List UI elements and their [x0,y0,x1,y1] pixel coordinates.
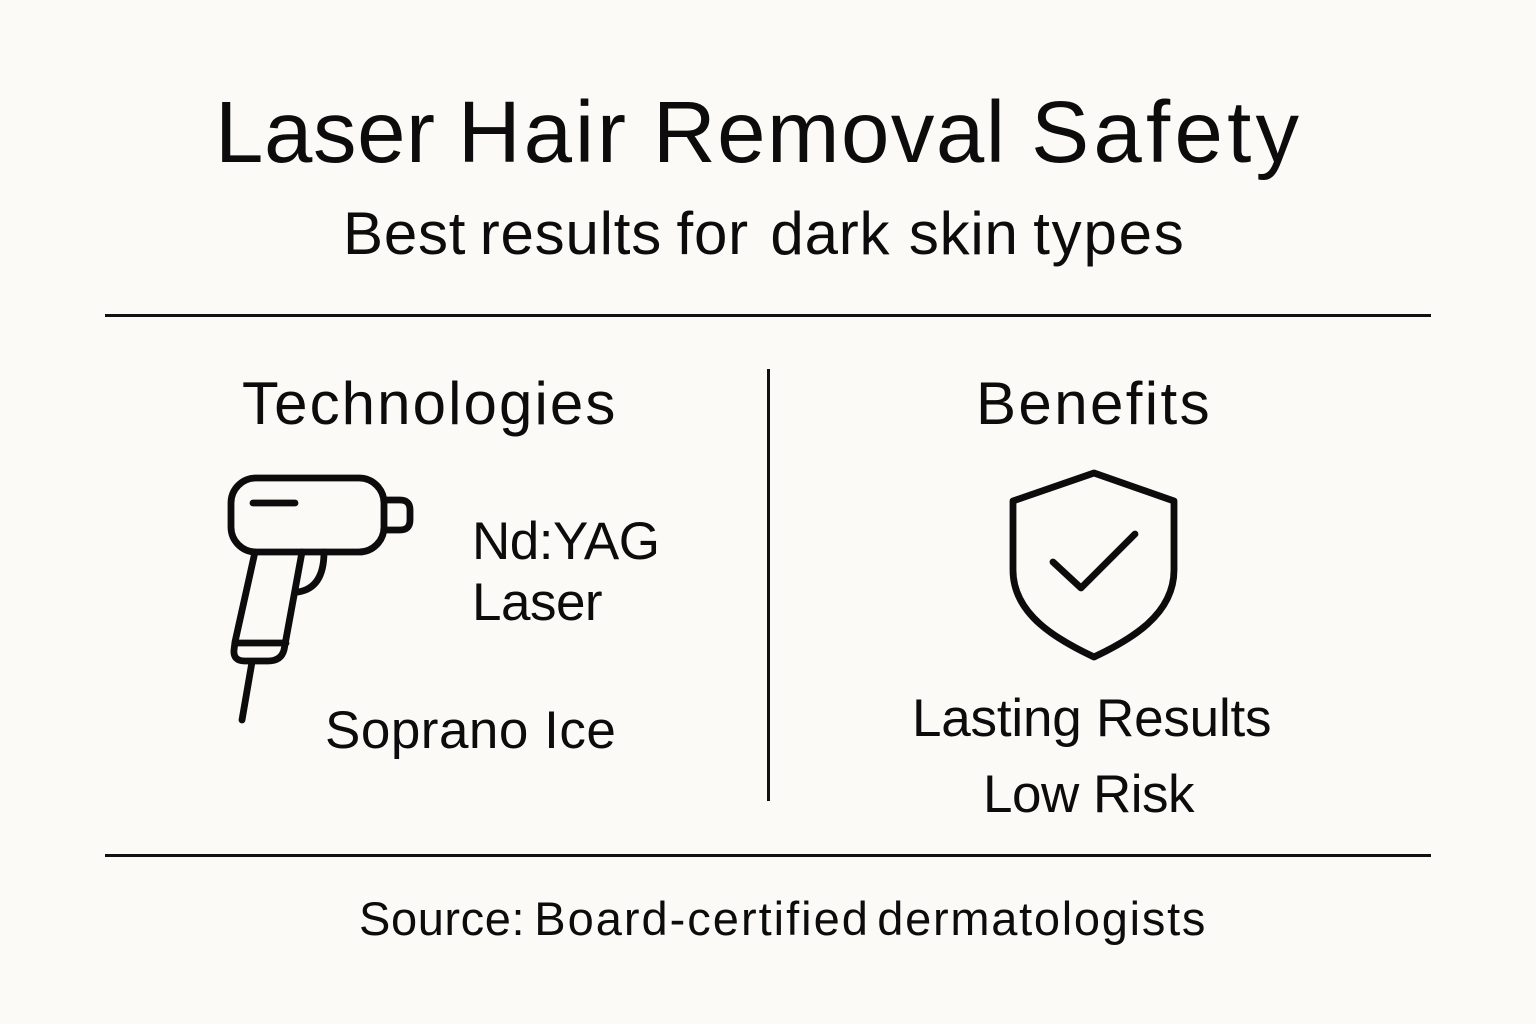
title: Laser Hair Removal Safety [215,84,1303,181]
label: Nd:YAG Laser: Nd:YAG [472,512,659,571]
panel: benefits [912,370,1271,824]
source note: Source: Board-certified dermatologists [359,892,1207,945]
label: Lasting Results: Lasting Results [912,689,1271,748]
icon: laser handpiece [228,474,414,724]
panel: technologies [228,370,659,760]
label: Nd:YAG Laser: Laser [472,573,602,632]
icon: shield with check [1010,470,1178,660]
subtitle: Best results for dark skin types [343,200,1186,267]
label: Soprano Ice: Soprano Ice [325,701,616,760]
label: Nd:YAG Laser [472,512,659,632]
heading: technologies: Technologies [242,370,617,437]
heading: benefits: Benefits [976,370,1212,437]
label: Low Risk: Low Risk [983,765,1194,824]
